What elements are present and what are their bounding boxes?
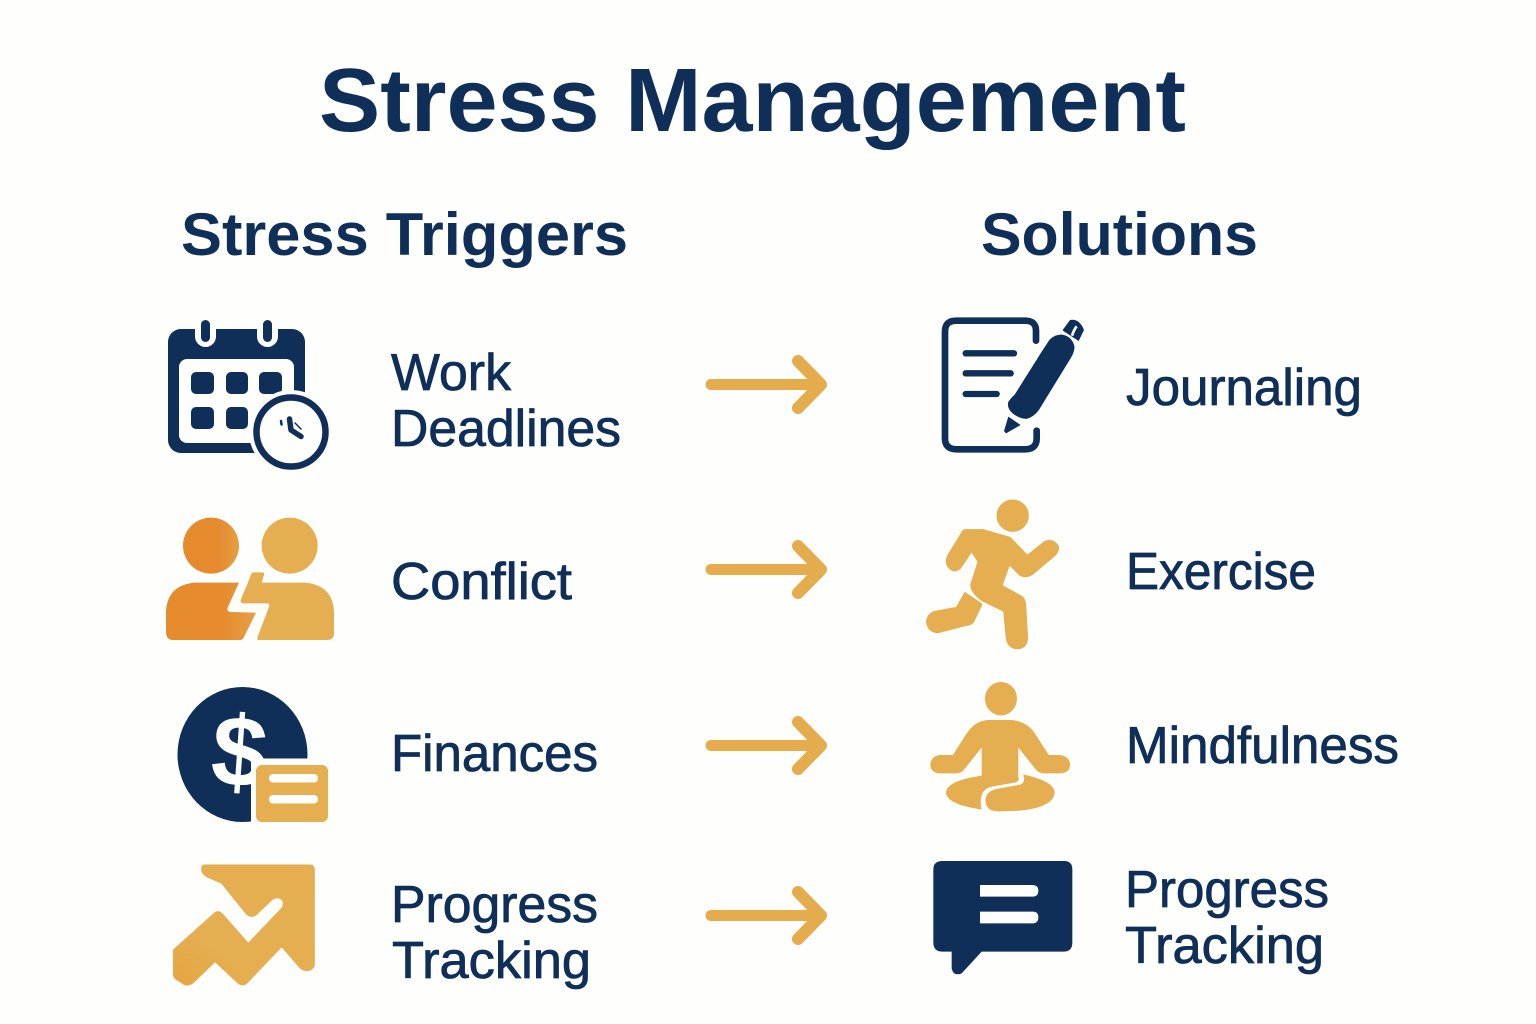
icon: journal and pen [945, 320, 1084, 449]
label: progress tracking (solution): Progress [1125, 861, 1329, 919]
label: journaling: Journaling [1126, 359, 1362, 417]
label: finances: Finances [391, 725, 598, 783]
label: progress tracking (solution) [1125, 861, 1329, 975]
title: Stress Management [319, 51, 1186, 151]
label: work deadlines: Deadlines [391, 400, 621, 458]
label: exercise: Exercise [1126, 543, 1316, 601]
icon: meditating person (mindfulness) [931, 683, 1069, 811]
label: progress tracking (trigger) [391, 876, 598, 990]
label: conflict: Conflict [391, 553, 573, 611]
icon: dollar coin with card [178, 687, 340, 830]
arrow: progress tracking to progress tracking [711, 892, 821, 939]
label: work deadlines: Work [391, 344, 512, 402]
heading: stress triggers: Stress Triggers [181, 201, 628, 268]
icon: speech bubble [933, 861, 1072, 974]
arrow: finances to mindfulness [711, 722, 821, 769]
icon: runner (exercise) [927, 500, 1058, 648]
label: progress tracking (trigger): Progress [391, 876, 598, 934]
arrow: conflict to exercise [711, 546, 821, 593]
icon: rising chart arrow [173, 865, 314, 985]
icon: two people in conflict [166, 518, 334, 640]
arrow: work deadlines to journaling [711, 361, 821, 408]
label: progress tracking (solution): Tracking [1125, 917, 1324, 975]
label: progress tracking (trigger): Tracking [392, 932, 591, 990]
icon: calendar with clock [168, 316, 333, 474]
label: work deadlines [391, 344, 621, 458]
heading: solutions: Solutions [981, 201, 1258, 268]
icon: dollar coin with card: $ [208, 694, 271, 810]
label: mindfulness: Mindfulness [1126, 717, 1399, 775]
